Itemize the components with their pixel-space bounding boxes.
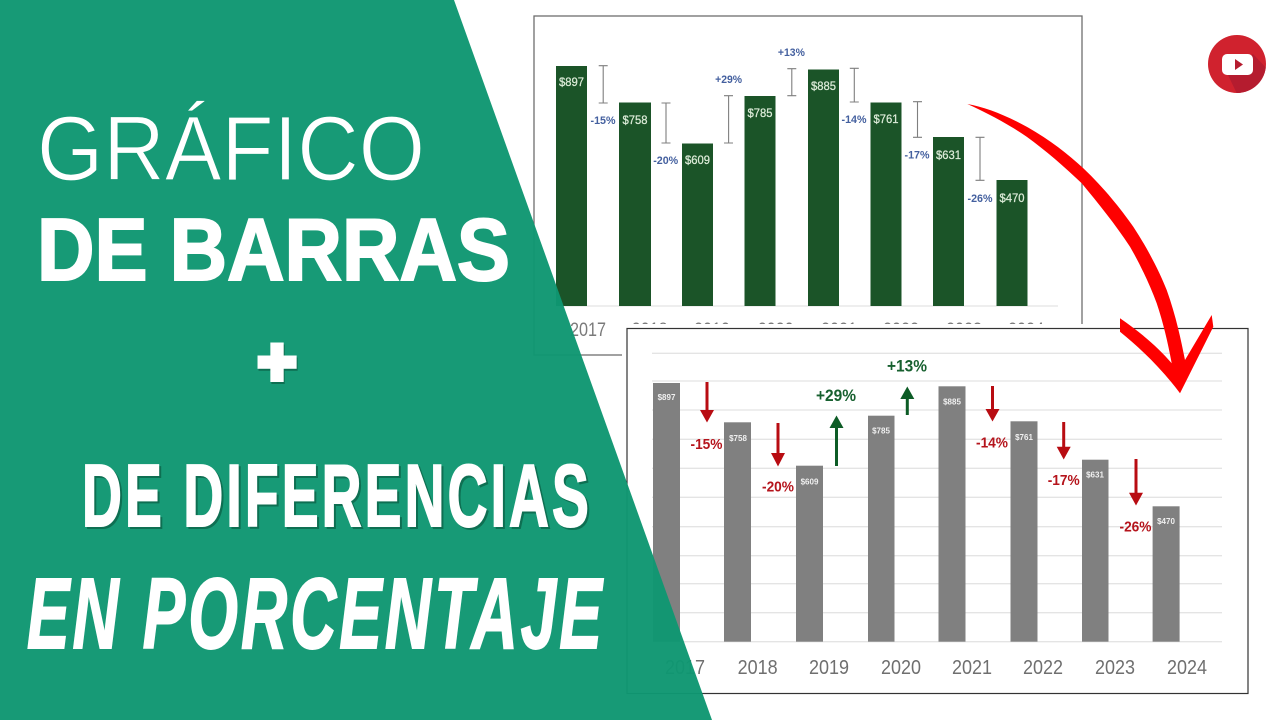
upper chart year labels: 2023 <box>946 320 982 341</box>
upper chart value labels: $758 <box>622 113 648 127</box>
upper chart year labels: 2017 <box>570 320 606 341</box>
lower chart year labels: 2022 <box>1023 657 1063 679</box>
lower chart percentage labels: -15% <box>690 436 722 453</box>
upper chart year labels: 2018 <box>632 320 668 341</box>
lower chart year labels: 2024 <box>1167 657 1207 679</box>
lower chart value labels: $758 <box>729 434 747 443</box>
lower chart percentage labels: -14% <box>976 435 1008 452</box>
upper chart percentage labels: +29% <box>715 74 742 86</box>
upper chart percentage labels: -14% <box>842 114 867 126</box>
lower chart value labels: $785 <box>872 426 890 436</box>
upper chart bars <box>556 66 1028 306</box>
lower chart year labels: 2020 <box>881 657 921 679</box>
upper chart percentage labels <box>590 47 993 205</box>
lower chart percentage labels <box>690 358 1152 536</box>
lower chart year labels: 2021 <box>952 657 992 679</box>
upper chart year labels: 2024 <box>1008 320 1044 341</box>
lower chart bars <box>653 383 1180 642</box>
upper chart value labels: $609 <box>685 153 710 167</box>
upper chart percentage labels: -15% <box>590 115 616 127</box>
arrow: big red curved arrow <box>967 104 1213 393</box>
icon: YouTube badge <box>1208 35 1266 93</box>
lower chart year labels <box>665 657 1207 679</box>
upper chart value labels: $785 <box>748 106 773 120</box>
upper chart baseline <box>556 305 1058 307</box>
lower chart percentage labels: +29% <box>816 387 856 405</box>
arrow: down 26 percent <box>1129 459 1143 506</box>
lower chart year labels: 2018 <box>738 657 778 679</box>
title block <box>27 98 605 670</box>
upper chart year labels <box>570 320 1044 341</box>
title: GRÁFICO: GRÁFICO <box>37 98 425 200</box>
upper chart error bars <box>599 66 984 180</box>
panel: lower chart with arrows <box>622 324 1252 700</box>
upper chart percentage labels: +13% <box>778 47 805 59</box>
title: DE BARRAS: DE BARRAS <box>37 200 510 299</box>
lower chart year labels: 2017 <box>665 657 705 679</box>
lower chart percentage labels: -26% <box>1120 519 1152 536</box>
lower chart value labels: $885 <box>943 398 961 406</box>
lower chart year labels: 2019 <box>809 657 849 679</box>
upper chart value labels <box>559 75 1025 205</box>
arrow: down 15 percent <box>700 382 714 422</box>
panel: green diagonal background <box>0 0 712 720</box>
lower chart value labels: $609 <box>801 478 819 486</box>
upper chart percentage labels: -17% <box>904 150 930 162</box>
upper chart year labels: 2019 <box>694 320 730 341</box>
upper chart value labels: $631 <box>936 148 961 162</box>
lower chart percentage labels: -20% <box>762 479 794 496</box>
lower chart value labels: $897 <box>658 393 676 402</box>
arrow: down 14 percent <box>986 386 1000 422</box>
title: DE DIFERENCIAS: DE DIFERENCIAS <box>82 446 592 545</box>
lower chart percentage labels: -17% <box>1048 472 1080 489</box>
arrow: down 17 percent <box>1057 422 1071 460</box>
upper chart year labels: 2020 <box>758 320 794 341</box>
upper chart value labels: $761 <box>874 112 899 126</box>
upper chart value labels: $470 <box>1000 191 1025 205</box>
plus sign: + <box>258 324 296 398</box>
arrow: up 13 percent <box>900 386 914 415</box>
upper chart value labels: $897 <box>559 75 584 89</box>
title: EN PORCENTAJE: EN PORCENTAJE <box>27 558 605 670</box>
lower chart trend arrows <box>700 382 1143 506</box>
lower chart value labels: $631 <box>1086 470 1104 480</box>
lower chart year labels: 2023 <box>1095 657 1135 679</box>
upper chart percentage labels: -20% <box>653 155 678 167</box>
lower chart value labels: $761 <box>1015 433 1033 442</box>
panel: upper chart with error bars <box>534 16 1082 355</box>
upper chart value labels: $885 <box>811 79 836 93</box>
arrow: up 29 percent <box>830 416 844 466</box>
lower chart value labels: $470 <box>1157 517 1175 526</box>
upper chart percentage labels: -26% <box>968 193 993 205</box>
upper chart year labels: 2022 <box>883 320 919 341</box>
arrow: down 20 percent <box>771 423 785 466</box>
upper chart year labels: 2021 <box>821 320 857 341</box>
lower chart value labels <box>658 393 1175 526</box>
lower chart percentage labels: +13% <box>887 358 927 376</box>
